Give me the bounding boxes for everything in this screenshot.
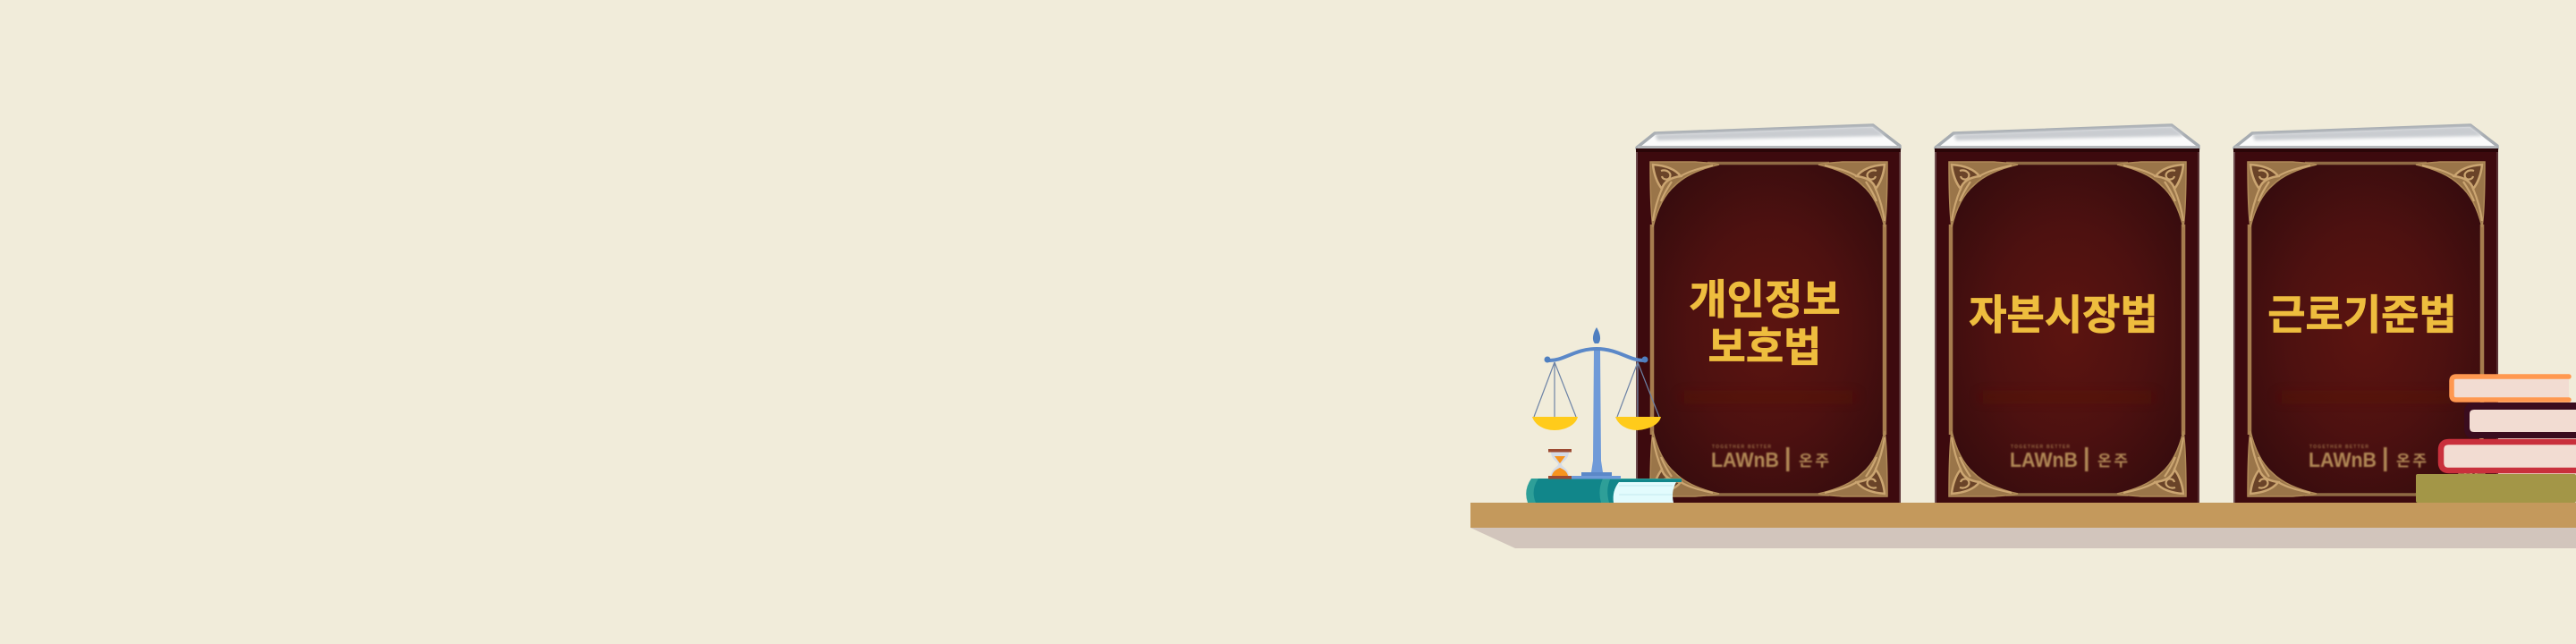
book title: 근로기준법 [2267, 292, 2457, 338]
stacked book: orange [2452, 377, 2569, 400]
stacked book: olive [2416, 474, 2576, 503]
book title: 개인정보 [1689, 276, 1841, 323]
book: 개인정보 보호법 [1636, 125, 1901, 503]
shelf shadow [1470, 528, 2576, 548]
book title: 자본시장법 [1969, 292, 2158, 338]
book title: 보호법 [1708, 324, 1821, 370]
publisher logo [1711, 445, 1829, 471]
book: 자본시장법 [1935, 125, 2199, 503]
icon: hourglass [1548, 449, 1572, 479]
icon: stacked books [2416, 377, 2576, 503]
icon: balance scale [1532, 327, 1661, 479]
shelf board [1470, 503, 2576, 528]
icon: teal book [1526, 479, 1682, 503]
stacked book: dark plum [2464, 402, 2576, 438]
publisher logo [2309, 445, 2427, 471]
publisher logo [2010, 445, 2128, 471]
stacked book: red [2441, 442, 2576, 470]
book: 근로기준법 [2233, 125, 2498, 503]
